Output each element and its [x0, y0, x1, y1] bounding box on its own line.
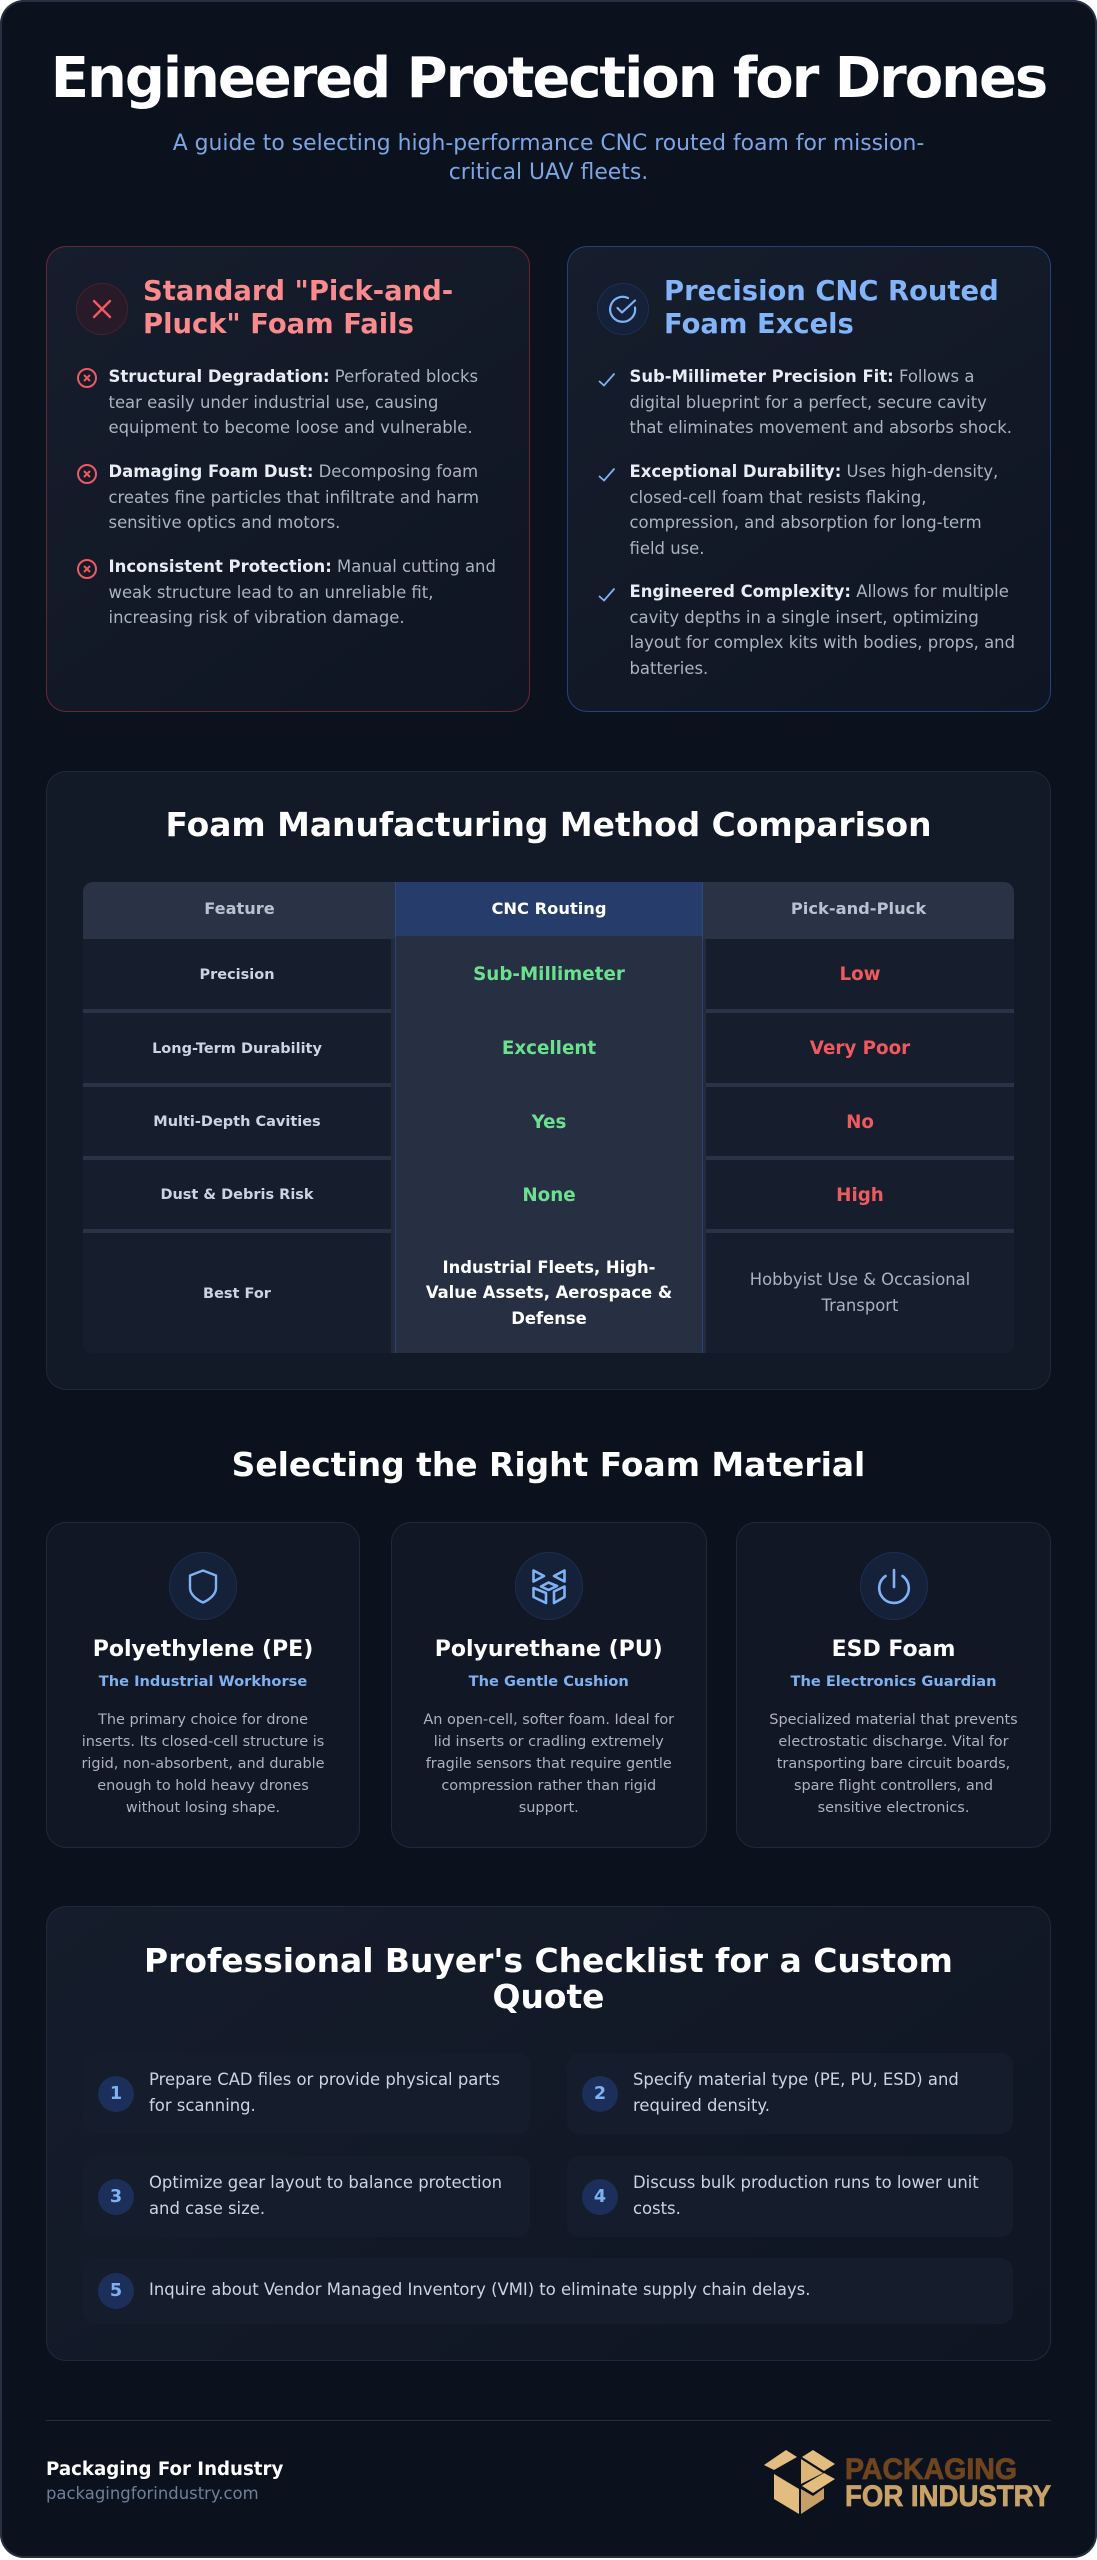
heading: selecting the right foam: Selecting the Right Foam Material [232, 1445, 865, 1484]
row: multi-depth cavities: Multi-Depth Cavities [153, 1114, 321, 1130]
checklist item 5 [83, 2258, 1013, 2324]
material card: polyethylene [46, 1522, 360, 1848]
row: long-term durability: Very Poor [810, 1038, 910, 1059]
failure: damaging foam dust: creates fine particles that infiltrate and harm [108, 488, 479, 506]
heading: checklist: Quote [492, 1977, 604, 2016]
benefit: exceptional durability: closed-cell foam that resists flaking, [630, 488, 926, 506]
row: precision: Sub-Millimeter [473, 964, 625, 985]
logo: packaging for industry: PACKAGING [845, 2453, 1017, 2486]
table header: Feature [204, 899, 275, 918]
row: best for: Defense [511, 1309, 587, 1328]
row: precision [83, 939, 1014, 1009]
text 3: Optimize gear layout to balance protection [149, 2173, 502, 2192]
row: multi-depth cavities [83, 1087, 1014, 1156]
failure: structural degradation: tear easily under industrial use, causing [108, 392, 438, 412]
description: inserts. Its closed-cell structure is [82, 1734, 324, 1750]
failure: damaging foam dust: Damaging Foam Dust: Decomposing foam [108, 462, 478, 481]
row: best for: Hobbyist Use & Occasional [750, 1270, 970, 1289]
description: lid inserts or cradling extremely [434, 1734, 664, 1750]
heading: pick-and-pluck fails: Pluck" Foam Fails [143, 308, 414, 340]
badge 4 [582, 2179, 618, 2215]
panel: cnc routed foam benefits [567, 246, 1051, 712]
description: support. [519, 1800, 579, 1816]
row: best for [83, 1233, 1014, 1353]
tagline: The Industrial Workhorse [99, 1673, 307, 1690]
text 2: required density. [633, 2096, 770, 2115]
icon: power [860, 1552, 928, 1620]
text 4 [633, 2173, 979, 2218]
icon: foam cells [515, 1552, 583, 1620]
row: best for: Value Assets, Aerospace & [426, 1283, 672, 1302]
panel: foam manufacturing comparison [46, 771, 1051, 1390]
panel: cnc routed foam benefits: field use. [630, 538, 705, 558]
description: sensitive electronics. [818, 1800, 969, 1816]
heading: pick-and-pluck fails: Standard "Pick-and- [143, 276, 453, 306]
tagline: The Electronics Guardian [791, 1673, 996, 1690]
description: enough to hold heavy drones [97, 1778, 309, 1794]
description [769, 1712, 1018, 1816]
description: compression rather than rigid [441, 1778, 656, 1794]
badge 2: 2 [594, 2084, 606, 2104]
failure: damaging foam dust [77, 462, 479, 532]
benefit: sub-millimeter fit: Sub-Millimeter Precision Fit: Follows a [630, 367, 974, 386]
text 1: Prepare CAD files or provide physical parts [149, 2070, 500, 2089]
benefit: exceptional durability: compression, and absorption for long-term [630, 513, 982, 532]
text 5: Inquire about Vendor Managed Inventory (VMI) to eliminate supply chain delays. [149, 2280, 810, 2299]
title: Engineered Protection for Drones [51, 46, 1046, 111]
row: best for: Industrial Fleets, High- [442, 1258, 655, 1277]
badge 4: 4 [594, 2187, 606, 2207]
row: multi-depth cavities: Yes [532, 1112, 566, 1132]
checklist item 3 [83, 2156, 530, 2237]
name: Polyurethane (PU) [435, 1637, 663, 1662]
text 2: Specify material type (PE, PU, ESD) and [633, 2070, 959, 2089]
row: dust and debris risk [83, 1160, 1014, 1229]
badge 5 [98, 2273, 134, 2309]
heading: checklist: Professional Buyer's Checklist for a Custom [144, 1941, 953, 1980]
text 3: and case size. [149, 2199, 265, 2218]
row: multi-depth cavities: No [846, 1112, 874, 1132]
description: Specialized material that prevents [769, 1712, 1018, 1728]
badge 3: 3 [110, 2187, 122, 2207]
badge 5: 5 [110, 2281, 122, 2301]
failure: damaging foam dust: sensitive optics and motors. [108, 513, 340, 532]
badge 1: 1 [110, 2084, 122, 2104]
benefit: engineered complexity: cavity depths in a single insert, optimizing [630, 608, 979, 626]
name: Polyethylene (PE) [93, 1637, 313, 1662]
text 2 [633, 2070, 959, 2115]
text 1 [149, 2070, 500, 2115]
name: ESD Foam [832, 1637, 955, 1662]
failure: inconsistent protection: weak structure lead to an unreliable fit, [108, 582, 433, 602]
icon: red cross [76, 283, 128, 335]
badge 1 [98, 2076, 134, 2112]
comparison table [83, 882, 1014, 1353]
panel: buyer's checklist [46, 1906, 1051, 2361]
row: dust and debris risk: High [836, 1184, 884, 1206]
logo: packaging for industry [764, 2450, 1052, 2514]
checklist item 2 [567, 2053, 1013, 2134]
brand name: Packaging For Industry [46, 2459, 283, 2480]
row: precision: Precision [199, 966, 275, 982]
benefit: sub-millimeter fit [598, 367, 1012, 437]
row: precision: Low [839, 964, 881, 985]
description: rigid, non-absorbent, and durable [81, 1756, 325, 1772]
description [81, 1712, 325, 1816]
description: spare flight controllers, and [794, 1778, 993, 1794]
row: dust and debris risk: None [522, 1184, 576, 1206]
panel: pick-and-pluck failures [46, 246, 530, 712]
description: An open-cell, softer foam. Ideal for [423, 1712, 674, 1728]
row: best for: Best For [203, 1286, 271, 1302]
text 3 [149, 2173, 502, 2218]
row: dust and debris risk: Dust & Debris Risk [160, 1187, 314, 1203]
description [423, 1712, 674, 1816]
benefit: sub-millimeter fit: that eliminates movement and absorbs shock. [630, 418, 1012, 437]
description: without losing shape. [126, 1800, 280, 1816]
text 1: for scanning. [149, 2096, 256, 2115]
failure: structural degradation: Structural Degradation: Perforated blocks [108, 367, 478, 386]
subtitle [173, 131, 924, 185]
subtitle: critical UAV fleets. [449, 160, 648, 185]
benefit: engineered complexity: Engineered Complexity: Allows for multiple [630, 582, 1009, 601]
benefit: sub-millimeter fit: digital blueprint for a perfect, secure cavity [630, 392, 987, 412]
subtitle: A guide to selecting high-performance CNC routed foam for mission- [173, 131, 924, 156]
description: The primary choice for drone [98, 1712, 308, 1728]
checklist item 1 [83, 2053, 530, 2134]
website: packagingforindustry.com [46, 2484, 259, 2503]
heading: cnc foam excels: Precision CNC Routed [664, 276, 999, 306]
failure: structural degradation [77, 367, 478, 437]
benefit: exceptional durability [598, 462, 998, 558]
panel: cnc routed foam benefits: batteries. [630, 658, 708, 678]
badge 2 [582, 2076, 618, 2112]
failure: inconsistent protection [77, 557, 496, 627]
failure: inconsistent protection: increasing risk of vibration damage. [108, 608, 405, 627]
heading: cnc foam excels: Foam Excels [664, 308, 854, 340]
description: fragile sensors that require gentle [426, 1756, 672, 1772]
heading: pick-and-pluck fails [143, 276, 453, 340]
description: transporting bare circuit boards, [777, 1756, 1010, 1772]
failure: inconsistent protection: Inconsistent Protection: Manual cutting and [108, 557, 496, 576]
heading: checklist [144, 1941, 953, 2016]
heading: comparison: Foam Manufacturing Method Comparison [165, 805, 932, 844]
icon: blue check badge [597, 283, 649, 335]
table header: CNC Routing [491, 898, 607, 918]
failure: structural degradation: equipment to become loose and vulnerable. [108, 418, 473, 437]
benefit: exceptional durability: Exceptional Durability: Uses high-density, [630, 462, 998, 481]
table header: Pick-and-Pluck [791, 899, 926, 918]
material card: polyurethane [391, 1522, 706, 1848]
icon: shield [169, 1552, 237, 1620]
row: best for: Transport [822, 1296, 898, 1314]
material card: esd foam [736, 1522, 1051, 1848]
row: long-term durability: Excellent [502, 1038, 596, 1059]
benefit: engineered complexity: layout for complex kits with bodies, props, and [630, 633, 1015, 652]
benefit: engineered complexity [598, 582, 1015, 678]
footer brand text [46, 2459, 283, 2503]
table header [204, 882, 926, 936]
badge 3 [98, 2179, 134, 2215]
heading: cnc foam excels [664, 276, 999, 340]
tagline: The Gentle Cushion [469, 1673, 629, 1690]
description: electrostatic discharge. Vital for [778, 1734, 1009, 1750]
checklist item 4 [567, 2156, 1013, 2237]
text 4: costs. [633, 2199, 681, 2218]
row: long-term durability: Long-Term Durability [152, 1040, 322, 1056]
text 4: Discuss bulk production runs to lower unit [633, 2173, 979, 2192]
row: long-term durability [83, 1013, 1014, 1083]
